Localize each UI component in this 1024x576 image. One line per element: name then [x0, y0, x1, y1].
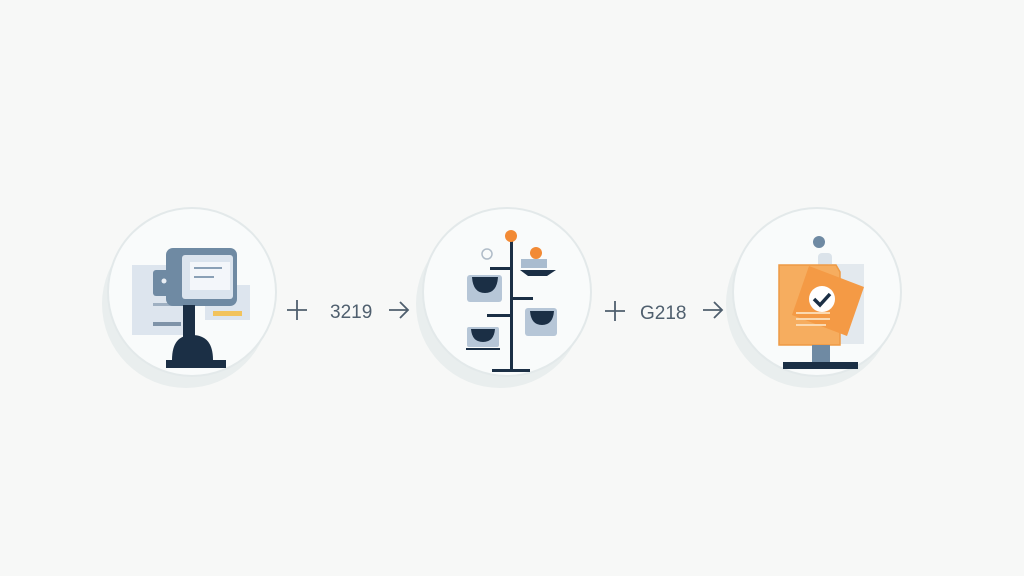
connector 1: 3219	[330, 302, 372, 323]
connector 2: G218	[640, 303, 686, 324]
connector 1	[287, 300, 408, 323]
connector 2	[605, 301, 722, 324]
step 3: document approval icon	[726, 208, 901, 388]
step 1: monitor icon	[102, 208, 276, 388]
step 2: tree icon	[416, 208, 591, 388]
